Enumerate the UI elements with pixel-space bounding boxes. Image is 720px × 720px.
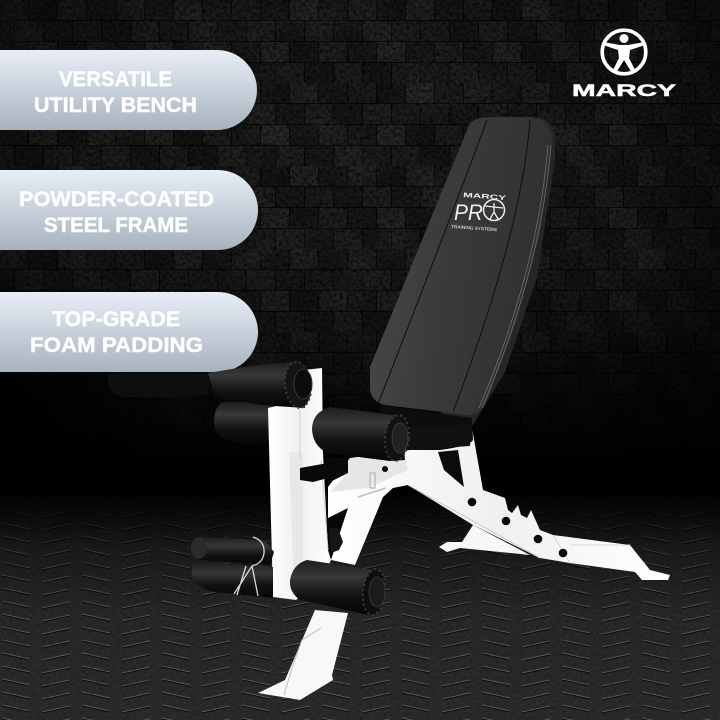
background: dark brick wall (0, 0, 720, 500)
feature pill: versatile utility bench: VERSATILE (59, 68, 172, 91)
front lower roller pad (290, 560, 387, 616)
logo: Marcy: MARCY (572, 81, 677, 100)
lower rear bar and roller pad (191, 537, 274, 598)
feature pill: versatile utility bench: UTILITY BENCH (34, 94, 197, 117)
lower rear roller pad (214, 402, 275, 445)
seat front roll (410, 425, 472, 450)
feature pill: powder-coated steel frame: STEEL FRAME (44, 214, 188, 237)
front right roller pad (312, 407, 411, 462)
icon: vitruvian figure in circle (602, 30, 646, 74)
feature pill: powder-coated steel frame (0, 170, 258, 250)
frame hardware (330, 458, 408, 492)
feature pill: versatile utility bench (0, 50, 257, 130)
logo: Marcy (572, 30, 677, 100)
dark gap behind frame (325, 490, 350, 560)
feature pill: powder-coated steel frame: POWDER-COATED (19, 188, 214, 211)
far left roller pad (108, 373, 208, 397)
black brackets on post (300, 458, 348, 483)
product: adjustable utility bench (108, 117, 670, 700)
spring clip (234, 537, 264, 596)
knob behind post (329, 528, 343, 553)
front floor leg and foot (258, 610, 348, 700)
backrest logo: Marcy Pro: PR (454, 200, 483, 225)
bolts on rear rail (382, 466, 567, 557)
background: tread plate floor (0, 490, 720, 720)
backrest side edge (440, 118, 555, 425)
vertical front post (268, 368, 331, 600)
seat pad (380, 405, 473, 450)
backrest pad with logo (370, 117, 552, 415)
backrest logo: Marcy Pro (451, 192, 507, 232)
opening in rear support (438, 450, 464, 487)
bench frame: rear support and rail (328, 428, 670, 580)
feature pill: top-grade foam padding (0, 292, 258, 372)
upper rear roller pad (208, 361, 313, 409)
backrest logo: Marcy Pro: MARCY (463, 192, 507, 202)
backrest logo: Marcy Pro: TRAINING SYSTEMS (451, 224, 497, 232)
feature pill: top-grade foam padding: FOAM PADDING (30, 334, 203, 357)
feature pill: top-grade foam padding: TOP-GRADE (52, 308, 180, 331)
